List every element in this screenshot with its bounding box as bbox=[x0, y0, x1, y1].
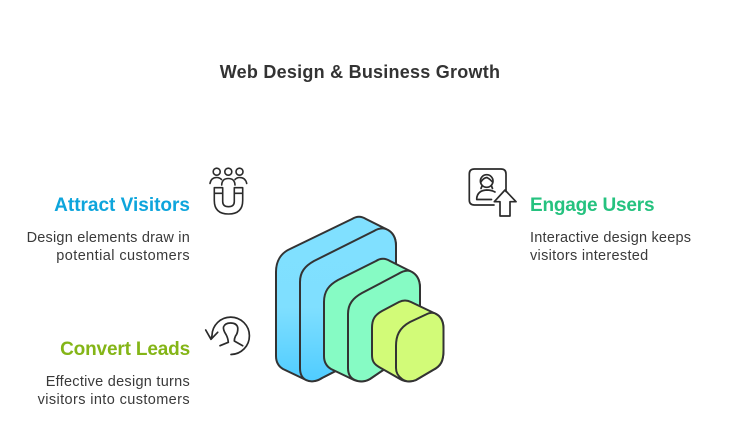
text: Attract Visitors description: Design elements draw in bbox=[27, 230, 190, 246]
green layer bbox=[324, 259, 420, 381]
text: Convert Leads description bbox=[38, 374, 190, 408]
icon: person with circular arrow bbox=[206, 317, 249, 354]
heading: Engage Users: Engage Users bbox=[530, 195, 654, 216]
title: Web Design & Business Growth bbox=[220, 62, 500, 82]
text: Attract Visitors description bbox=[27, 230, 190, 264]
yellow layer bbox=[372, 300, 444, 381]
text: Engage Users description: visitors interested bbox=[530, 248, 649, 264]
text: Engage Users description bbox=[530, 230, 691, 264]
text: Convert Leads description: Effective design turns bbox=[46, 374, 190, 390]
icon: user profile with up arrow bbox=[469, 169, 516, 216]
icon: people and magnet bbox=[210, 168, 247, 214]
text: Attract Visitors description: potential customers bbox=[56, 248, 190, 264]
text: Convert Leads description: visitors into customers bbox=[38, 392, 190, 408]
blue layer bbox=[276, 217, 396, 381]
heading: Attract Visitors: Attract Visitors bbox=[54, 195, 190, 216]
heading: Convert Leads: Convert Leads bbox=[60, 339, 190, 360]
text: Engage Users description: Interactive design keeps bbox=[530, 230, 691, 246]
